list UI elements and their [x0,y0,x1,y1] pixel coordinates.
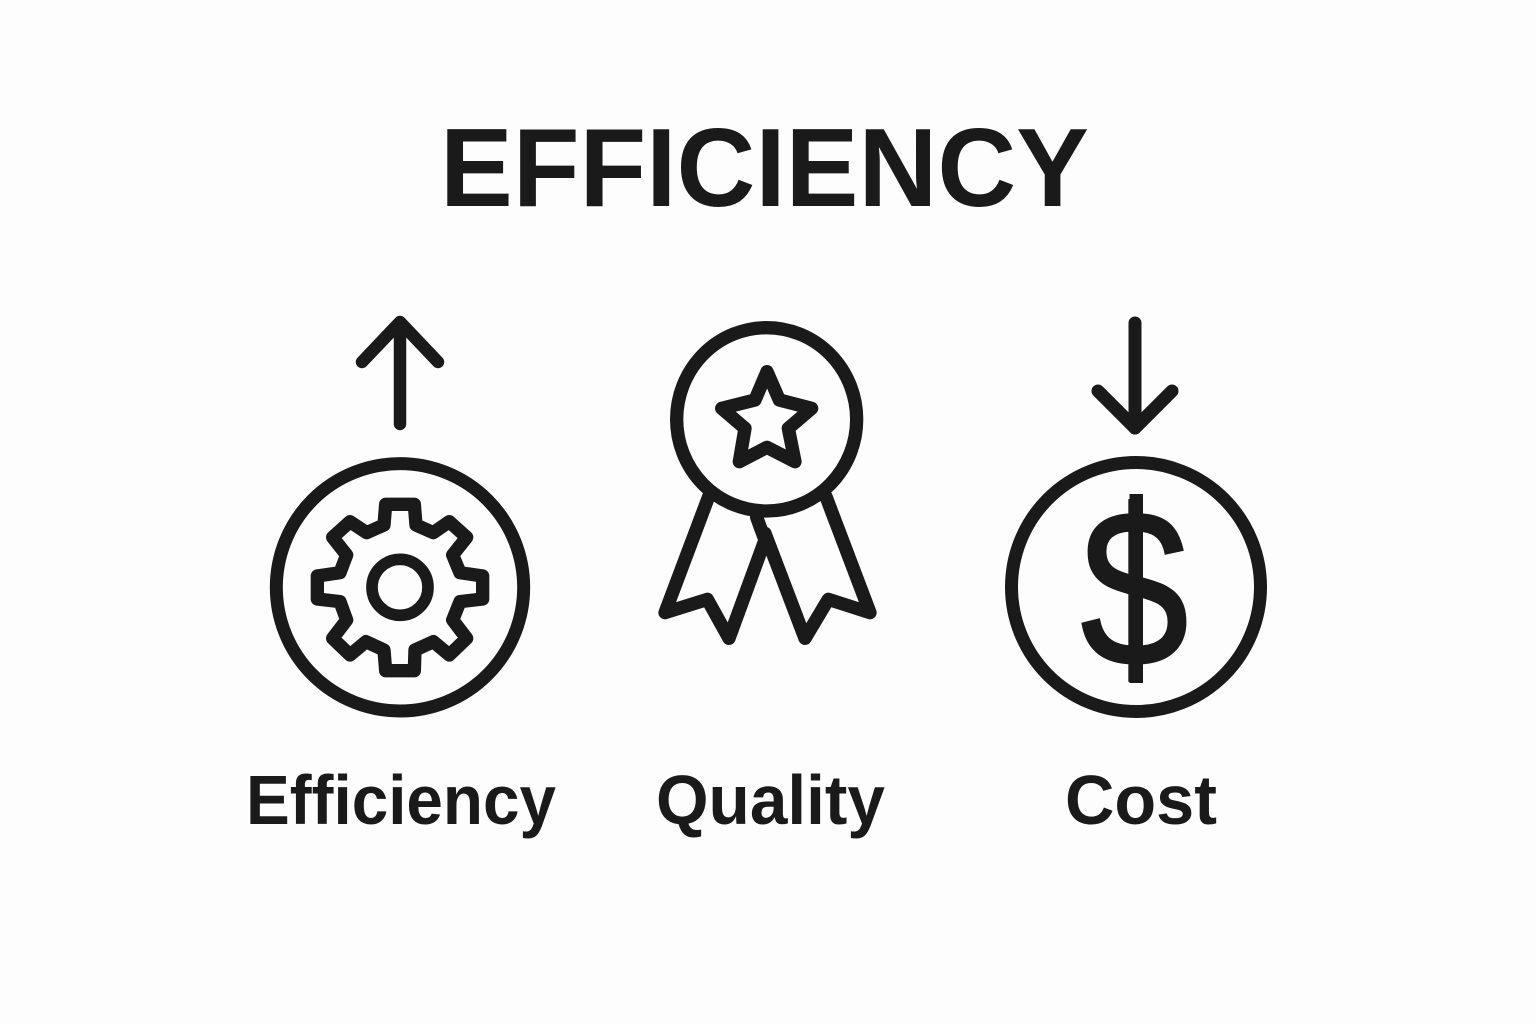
label: efficiency: Efficiency [246,761,556,839]
icon: down arrow [1098,323,1172,428]
icon: up arrow [362,322,438,424]
icon: gear in circle [276,464,524,711]
icon: dollar coin: $ [1081,465,1188,713]
icon: dollar coin [1012,462,1260,713]
icon: award ribbon with star [665,328,870,638]
title: EFFICIENCY [440,106,1089,230]
label: quality: Quality [656,761,885,839]
label: cost: Cost [1065,761,1217,839]
